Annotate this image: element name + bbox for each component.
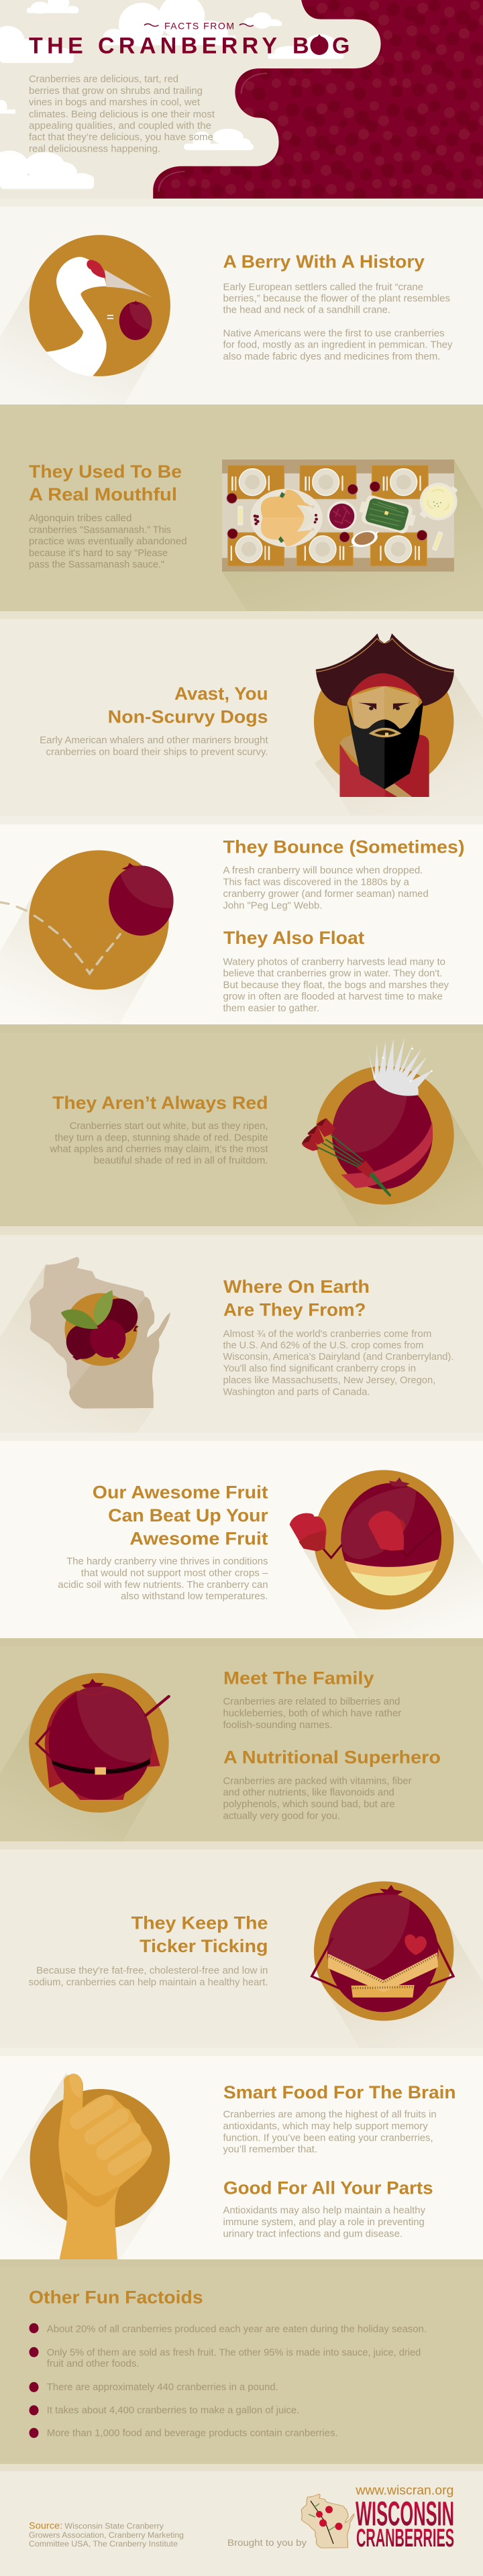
heading: Ticker Ticking [140,1936,268,1956]
icon: thumbs up [0,2073,170,2259]
panel: they bounce and float [0,816,483,1024]
icon: crane and cranberry [30,235,170,376]
body text: You'll also find significant cranberry crops in [223,1364,416,1375]
panel: our awesome fruit [0,1433,483,1638]
body text: Early American whalers and other mariners brought [40,735,268,746]
heading [223,1277,370,1320]
body text: Cranberries are among the highest of all fruits in [223,2110,437,2121]
body text: actually very good for you. [223,1811,340,1821]
heading: Smart Food For The Brain [223,2082,456,2102]
heading: A Berry With A History [223,252,425,272]
body text: they turn a deep, stunning shade of red. Despite [55,1132,268,1143]
body text: believe that cranberries grow in water. They don't. [223,969,442,979]
heading: Other Fun Factoids [29,2287,203,2307]
source: Wisconsin State Cranberry [64,2523,164,2531]
body text: Because they're fat-free, cholesterol-free and low in [36,1966,268,1976]
panel: where on earth are they from [0,1226,483,1433]
body text [223,1697,401,1731]
body text: because it's hard to say "Please [29,548,168,559]
body text: the U.S. And 62% of the U.S. crop comes from [223,1340,423,1351]
brought to you by: Brought to you by [227,2537,307,2548]
intro text [29,74,215,155]
heading: Good For All Your Parts [223,2178,433,2198]
intro text: real deliciousness happening. [29,144,160,155]
body text: Wisconsin, America's Dairyland (and Cranberryland). [223,1352,453,1362]
body text: Watery photos of cranberry harvests lead many to [223,957,445,967]
heading: Awesome Fruit [129,1528,268,1548]
body text: beautiful shade of red in all of fruitdom. [94,1156,268,1167]
source [29,2520,184,2548]
body text: sodium, cranberries can help maintain a healthy heart. [29,1977,268,1988]
clouds [0,0,343,189]
panel: avast, you non-scurvy dogs [0,611,483,816]
intro text: vines in bogs and marshes in cool, wet [29,97,200,108]
panel: other fun factoids [0,2259,483,2464]
body text: Washington and parts of Canada. [223,1387,370,1397]
body text [29,1966,268,1988]
panel: they used to be a real mouthful [0,405,483,611]
heading [131,1913,268,1956]
body text: them easier to gather. [223,1003,319,1014]
body text: Cranberries are packed with vitamins, fiber [223,1776,412,1787]
body text: that would not support most other crops – [81,1568,268,1578]
body text [40,735,268,758]
body text: Cranberries start out white, but as they ripen, [70,1121,268,1132]
body text [223,282,453,362]
body text: also withstand low temperatures. [121,1591,268,1602]
factoid list: It takes about 4,400 cranberries to make a gallon of juice. [47,2406,299,2416]
heading: Avast, You [174,684,268,704]
body text: function. If you’ve been eating your cranberries, [223,2133,433,2143]
body text: polyphenols, which sound bad, but are [223,1799,395,1810]
source: Growers Association, Cranberry Marketing [29,2532,184,2540]
intro text: appealing qualities, and coupled with the [29,121,211,131]
body text: A fresh cranberry will bounce when dropped. [223,865,423,876]
body text: Early European settlers called the fruit “crane [223,282,423,292]
factoid list: There are approximately 440 cranberries in a pound. [47,2382,278,2393]
heading: They Also Float [223,928,364,948]
factoid bullets [30,2323,39,2438]
heading: Can Beat Up Your [108,1505,268,1525]
icon: cranberry with heart and tape measure [312,1881,453,2021]
panel: header [0,0,483,199]
source: Source: [29,2520,62,2531]
logo: wisconsin cranberries [301,2484,454,2553]
body text: foolish-sounding names. [223,1720,333,1731]
factoid list [47,2324,427,2439]
heading: They Aren’t Always Red [52,1093,268,1113]
icon: thanksgiving table [222,460,458,572]
factoid list: More than 1,000 food and beverage products contain cranberries. [47,2428,338,2439]
body text: urinary tract infections and gum disease. [223,2229,402,2239]
body text: also made fabric dyes and medicines from them. [223,352,440,362]
body text [29,513,187,570]
title: BOG [292,34,350,59]
heading: Meet The Family [223,1668,374,1688]
body text: Antioxidants may also help maintain a healthy [223,2206,426,2216]
body text: acidic soil with few nutrients. The cranberry can [58,1580,268,1591]
body text: antioxidants, which may help support memory [223,2121,429,2132]
body text: grow in often are flooded at harvest time to make [223,991,443,1002]
intro text: Cranberries are delicious, tart, red [29,74,178,85]
body text: practice was eventually abandoned [29,537,187,547]
body text [223,1776,412,1821]
icon: beauty queen cranberry [302,1038,454,1205]
heading: Where On Earth [223,1277,370,1297]
panel: they aren't always red [0,1024,483,1226]
panel: they keep the ticker ticking [0,1841,483,2048]
body text: cranberry grower (and former seaman) named [223,889,429,900]
panel: meet the family and nutritional superhero [0,1638,483,1841]
icon: pirate [314,633,483,816]
title: THE CRANBERRY [29,34,277,59]
panel: a berry with a history [0,199,483,405]
heading: They Bounce (Sometimes) [223,837,464,857]
icon: bouncing cranberry [0,850,176,989]
body text: what apples and cherries may claim, it's the most [49,1144,268,1155]
body text: you’ll remember that. [223,2144,317,2155]
body text: Algonquin tribes called [29,513,132,524]
body text: John "Peg Leg" Webb. [223,900,322,911]
body text: The hardy cranberry vine thrives in conditions [66,1556,268,1567]
kicker: facts from: FACTS FROM [164,20,234,31]
heading: A Real Mouthful [29,484,177,504]
body text: and other nutrients, like flavonoids and [223,1788,394,1799]
body text: pass the Sassamanash sauce." [29,559,164,570]
body text: immune system, and play a role in preventing [223,2217,425,2228]
icon: boxing cranberry [290,1470,483,1638]
kicker: facts from [144,20,254,31]
heading [108,684,268,727]
intro text: climates. Being delicious is one their most [29,109,215,120]
heading [29,462,182,504]
body text [223,957,449,1014]
body text: the head and neck of a sandhill crane. [223,305,390,316]
body text: Almost ¾ of the world's cranberries come from [223,1329,431,1340]
intro text: fact that they’re delicious, you have some [29,132,213,143]
panel: footer [0,2464,483,2576]
heading: A Nutritional Superhero [223,1747,441,1767]
body text: But because they float, the bogs and marshes they [223,980,449,991]
body text: places like Massachusetts, New Jersey, Oregon, [223,1375,435,1386]
body text [223,865,429,911]
heading: They Keep The [131,1913,268,1933]
heading: Non-Scurvy Dogs [108,707,268,727]
body text: This fact was discovered in the 1880s by a [223,877,410,888]
body text: for food, mostly as an ingredient in pemmican. They [223,339,453,350]
heading: Are They From? [223,1299,366,1320]
body text: cranberries on board their ships to prevent scurvy. [46,747,268,758]
icon: wisconsin map with cranberries [0,1256,172,1433]
body text [49,1121,268,1167]
heading: They Used To Be [29,462,182,482]
body text [223,2110,437,2155]
factoid list: fruit and other foods. [47,2359,140,2369]
factoid list: About 20% of all cranberries produced each year are eaten during the holiday season. [47,2324,427,2335]
body text: Cranberries are related to bilberries and [223,1697,400,1707]
body text: huckleberries, both of which have rather [223,1708,401,1719]
heading [93,1482,268,1548]
heading: Our Awesome Fruit [93,1482,268,1502]
body text: Native Americans were the first to use cranberries [223,328,444,339]
factoid list: Only 5% of them are sold as fresh fruit. The other 95% is made into sauce, juice, dried [47,2347,421,2358]
panel: smart food and good for all your parts [0,2048,483,2259]
cranberry bog texture [148,0,483,199]
source: Committee USA, The Cranberry Institute [29,2540,178,2548]
icon: superhero cranberry [29,1673,169,1813]
body text [223,2206,426,2239]
body text: cranberries "Sassamanash." This [29,525,171,535]
body text [223,1329,453,1397]
logo: wisconsin cranberries: www.wiscran.org [355,2484,453,2498]
body text: berries,” because the flower of the plant resembles [223,294,450,305]
body text [58,1556,268,1602]
intro text: berries that grow on shrubs and trailing [29,86,203,97]
